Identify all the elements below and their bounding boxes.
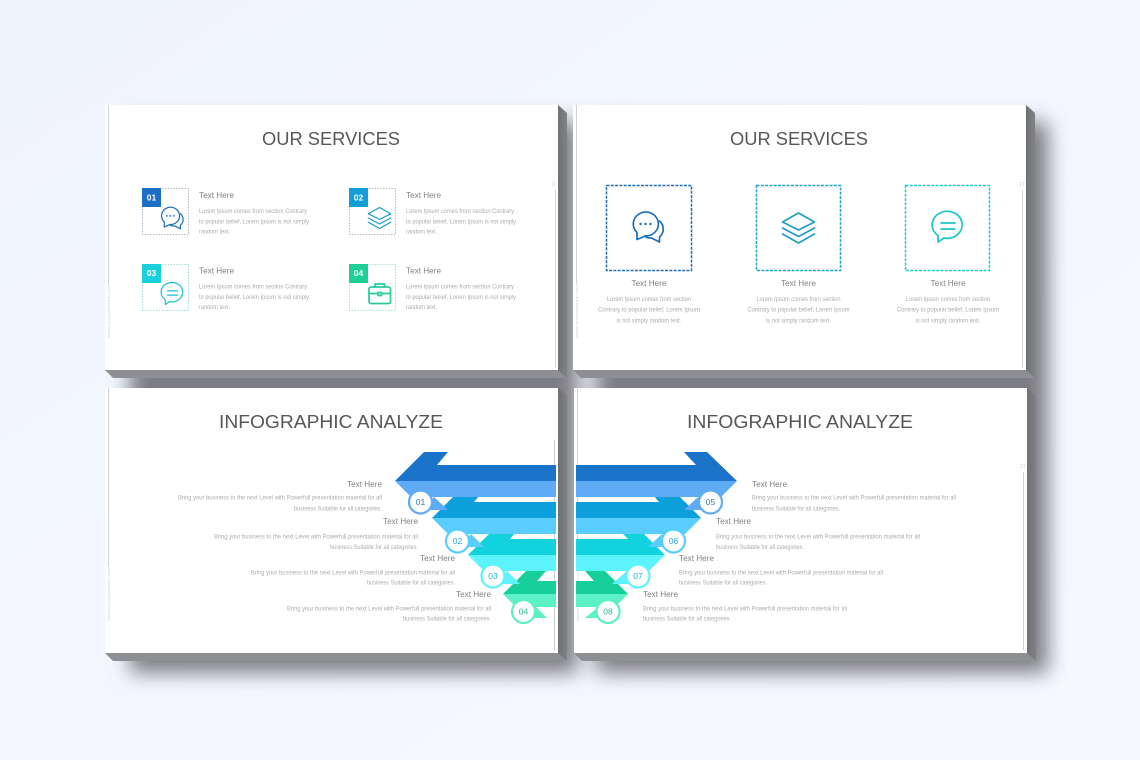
number badge 01 xyxy=(409,490,432,514)
text block 03: Text Here xyxy=(420,553,455,563)
number badge 04: 04 xyxy=(519,606,528,616)
icon: layers xyxy=(782,213,814,243)
item 02: to popular belief, Lorem Ipsum is not simply xyxy=(406,220,516,226)
arrow 01 xyxy=(395,452,556,510)
icon: briefcase xyxy=(369,284,390,304)
text block 08: Text Here xyxy=(643,589,678,599)
item 02: 02 xyxy=(354,192,363,202)
column 3: Text Here xyxy=(930,278,966,288)
number badge 02: 02 xyxy=(453,536,462,546)
text block 02: Text Here xyxy=(383,516,418,526)
item 01: random text. xyxy=(199,230,230,236)
column 1: Text Here xyxy=(632,278,667,288)
arrow 07 xyxy=(576,526,665,584)
item 03: to popular belief, Lorem Ipsum is not simply xyxy=(199,295,309,301)
icon: speech bubble xyxy=(932,211,962,242)
column 1: is not simply random text. xyxy=(616,318,682,324)
column 2: Contrary to popular belief, Lorem Ipsum xyxy=(748,308,850,314)
text block 01 xyxy=(178,479,382,512)
text block 08: business Suitable for all categories. xyxy=(643,616,731,622)
title: OUR SERVICES xyxy=(730,128,868,149)
number badge 05: 05 xyxy=(706,497,715,507)
number badge 01: 01 xyxy=(416,497,425,507)
item 02: Lorem Ipsum comes from section Contrary xyxy=(406,209,514,215)
arrow 08 xyxy=(576,571,628,618)
text block 03: business Suitable for all categories. xyxy=(367,580,455,586)
text block 04 xyxy=(287,589,491,622)
item 04: to popular belief, Lorem Ipsum is not simply xyxy=(406,295,516,301)
arrow 05 xyxy=(576,452,737,510)
item 03 xyxy=(142,264,309,311)
title: INFOGRAPHIC ANALYZE xyxy=(219,411,443,432)
column 2 xyxy=(748,186,850,324)
item 04: Lorem Ipsum comes from section Contrary xyxy=(406,284,514,290)
number badge 05 xyxy=(699,490,722,514)
panel: slide 3, infographic analyze left xyxy=(105,388,567,661)
item 03: random text. xyxy=(199,305,230,311)
item 02: Text Here xyxy=(406,190,441,200)
text block 07: business Suitable for all categories. xyxy=(679,580,767,586)
number badge 06: 06 xyxy=(669,536,678,546)
text block 01: Text Here xyxy=(347,479,382,489)
text block 07: Text Here xyxy=(679,553,714,563)
number badge 03 xyxy=(482,564,504,588)
item 04: random text. xyxy=(406,305,437,311)
text block 05 xyxy=(752,479,956,512)
panel: slide 2, our services three columns: www.yourdomain.com xyxy=(575,283,579,338)
number badge 03: 03 xyxy=(488,571,498,581)
text block 06: business Suitable for all categories. xyxy=(716,545,804,551)
text block 08 xyxy=(643,589,847,622)
item 01: Lorem Ipsum comes from section Contrary xyxy=(199,209,307,215)
number badge 08 xyxy=(596,600,620,623)
column 1: Lorem Ipsum comes from section xyxy=(607,297,691,303)
title: INFOGRAPHIC ANALYZE xyxy=(687,411,913,432)
text block 07 xyxy=(679,553,883,586)
panel: slide 4, infographic analyze right: 21 xyxy=(1020,464,1026,470)
arrow 02 xyxy=(432,489,556,547)
column 3 xyxy=(897,186,999,324)
item 01: 01 xyxy=(147,192,156,202)
text block 02 xyxy=(214,516,418,551)
item 02 xyxy=(349,188,516,236)
title: OUR SERVICES xyxy=(262,128,400,149)
text block 06: Text Here xyxy=(716,516,751,526)
panel: slide 3, infographic analyze left: www.yourdomain.com xyxy=(107,566,111,621)
item 01: to popular belief, Lorem Ipsum is not simply xyxy=(199,220,309,226)
text block 06 xyxy=(716,516,920,551)
panel: slide 4, infographic analyze right xyxy=(574,388,1036,661)
item 02: random text. xyxy=(406,230,437,236)
panel: slide 4, infographic analyze right: www.yourdomain.com xyxy=(576,566,580,621)
column 1: Contrary to popular belief, Lorem Ipsum xyxy=(598,308,700,314)
text block 05: business Suitable for all categories. xyxy=(752,506,840,512)
number badge 04 xyxy=(512,600,535,623)
text block 07: Bring your business to the next Level with Powerfull presentation material for all xyxy=(679,570,883,576)
drop shadows under the slides xyxy=(130,122,1048,673)
column 3: is not simply random text. xyxy=(916,318,981,324)
column 2: is not simply random text. xyxy=(766,318,831,324)
item 01 xyxy=(142,188,309,236)
arrow 06 xyxy=(576,489,701,547)
item 03: Lorem Ipsum comes from section Contrary xyxy=(199,284,307,290)
icon: chat bubbles xyxy=(633,212,663,242)
item 03: 03 xyxy=(147,268,156,278)
panel: slide 1, our services four items xyxy=(105,105,567,378)
icon: chat bubbles xyxy=(162,207,183,229)
column 2: Lorem Ipsum comes from section xyxy=(756,297,840,303)
item 01: Text Here xyxy=(199,190,234,200)
number badge 07: 07 xyxy=(633,571,643,581)
column 3: Contrary to popular belief, Lorem Ipsum xyxy=(897,308,999,314)
text block 03: Bring your business to the next Level with Powerfull presentation material for all xyxy=(251,570,455,576)
text block 02: business Suitable for all categories. xyxy=(330,545,418,551)
text block 04: Text Here xyxy=(456,589,491,599)
item 04: 04 xyxy=(354,268,363,278)
item 04: Text Here xyxy=(406,266,441,276)
panel: slide 1, our services four items: www.yourdomain.com xyxy=(107,283,111,338)
panel: slide 2, our services three columns: 12 xyxy=(1019,182,1025,188)
text block 06: Bring your business to the next Level with Powerfull presentation material for all xyxy=(716,534,920,540)
column 1 xyxy=(598,186,700,324)
arrow 03 xyxy=(468,526,556,584)
panel: slide 1, our services four items: 11 xyxy=(551,182,556,188)
icon: layers xyxy=(368,208,391,228)
text block 01: Bring your business to the next Level with Powerfull presentation material for all xyxy=(178,496,382,502)
arrow 04 xyxy=(503,571,556,618)
text block 04: Bring your business to the next Level with Powerfull presentation material for all xyxy=(287,606,491,612)
column 3: Lorem Ipsum comes from section xyxy=(906,297,990,303)
number badge 08: 08 xyxy=(603,606,613,616)
text block 05: Bring your business to the next Level with Powerfull presentation material for all xyxy=(752,496,956,502)
item 03: Text Here xyxy=(199,266,234,276)
column 2: Text Here xyxy=(781,278,816,288)
number badge 06 xyxy=(662,530,685,552)
number badge 02 xyxy=(446,530,469,552)
text block 03 xyxy=(251,553,455,586)
text block 05: Text Here xyxy=(752,479,787,489)
icon: speech bubble xyxy=(161,282,183,305)
text block 01: business Suitable for all categories. xyxy=(294,506,382,512)
text block 02: Bring your business to the next Level with Powerfull presentation material for all xyxy=(214,534,418,540)
number badge 07 xyxy=(626,564,650,588)
panel: slide 2, our services three columns xyxy=(573,105,1035,378)
item 04 xyxy=(349,264,516,311)
text block 08: Bring your business to the next Level with Powerfull presentation material for all xyxy=(643,606,847,612)
text block 04: business Suitable for all categories. xyxy=(403,616,491,622)
